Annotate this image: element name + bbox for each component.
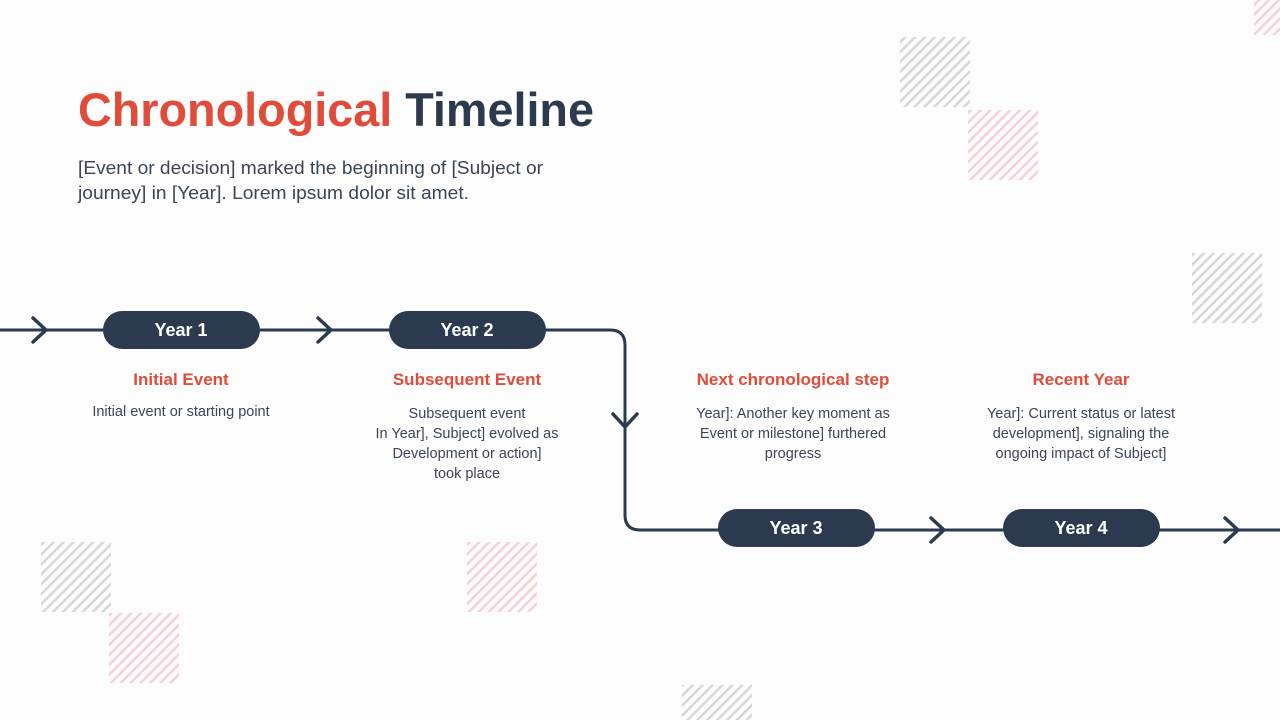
event descriptions: ongoing impact of Subject] [996, 446, 1166, 462]
subtitle: journey] in [Year]. Lorem ipsum dolor sit amet. [77, 183, 469, 203]
event descriptions: Next chronological step [697, 370, 889, 389]
timeline path [0, 330, 1280, 530]
subtitle: [Event or decision] marked the beginning of [Subject or [78, 158, 543, 178]
event descriptions: development], signaling the [993, 426, 1169, 442]
event descriptions: took place [434, 466, 500, 482]
event descriptions: Subsequent event [409, 406, 525, 422]
event descriptions: Event or milestone] furthered [700, 426, 886, 442]
year pills [103, 311, 1160, 547]
title: Chronological Timeline [78, 83, 594, 136]
subtitle [77, 158, 543, 203]
event descriptions: Recent Year [1032, 370, 1130, 389]
year pills: Year 2 [440, 320, 494, 340]
event descriptions: Subsequent Event [393, 370, 541, 389]
event descriptions: Development or action] [392, 446, 542, 462]
event descriptions: Year]: Current status or latest [987, 406, 1175, 422]
year pills: Year 1 [154, 320, 208, 340]
event descriptions: In Year], Subject] evolved as [376, 426, 558, 442]
year pills: Year 3 [769, 518, 823, 538]
event descriptions: progress [765, 446, 821, 462]
arrows [33, 318, 1238, 542]
event descriptions [92, 370, 1175, 482]
event descriptions: Initial Event [133, 370, 229, 389]
year pills: Year 4 [1054, 518, 1108, 538]
event descriptions: Initial event or starting point [92, 404, 270, 420]
event descriptions: Year]: Another key moment as [696, 406, 890, 422]
